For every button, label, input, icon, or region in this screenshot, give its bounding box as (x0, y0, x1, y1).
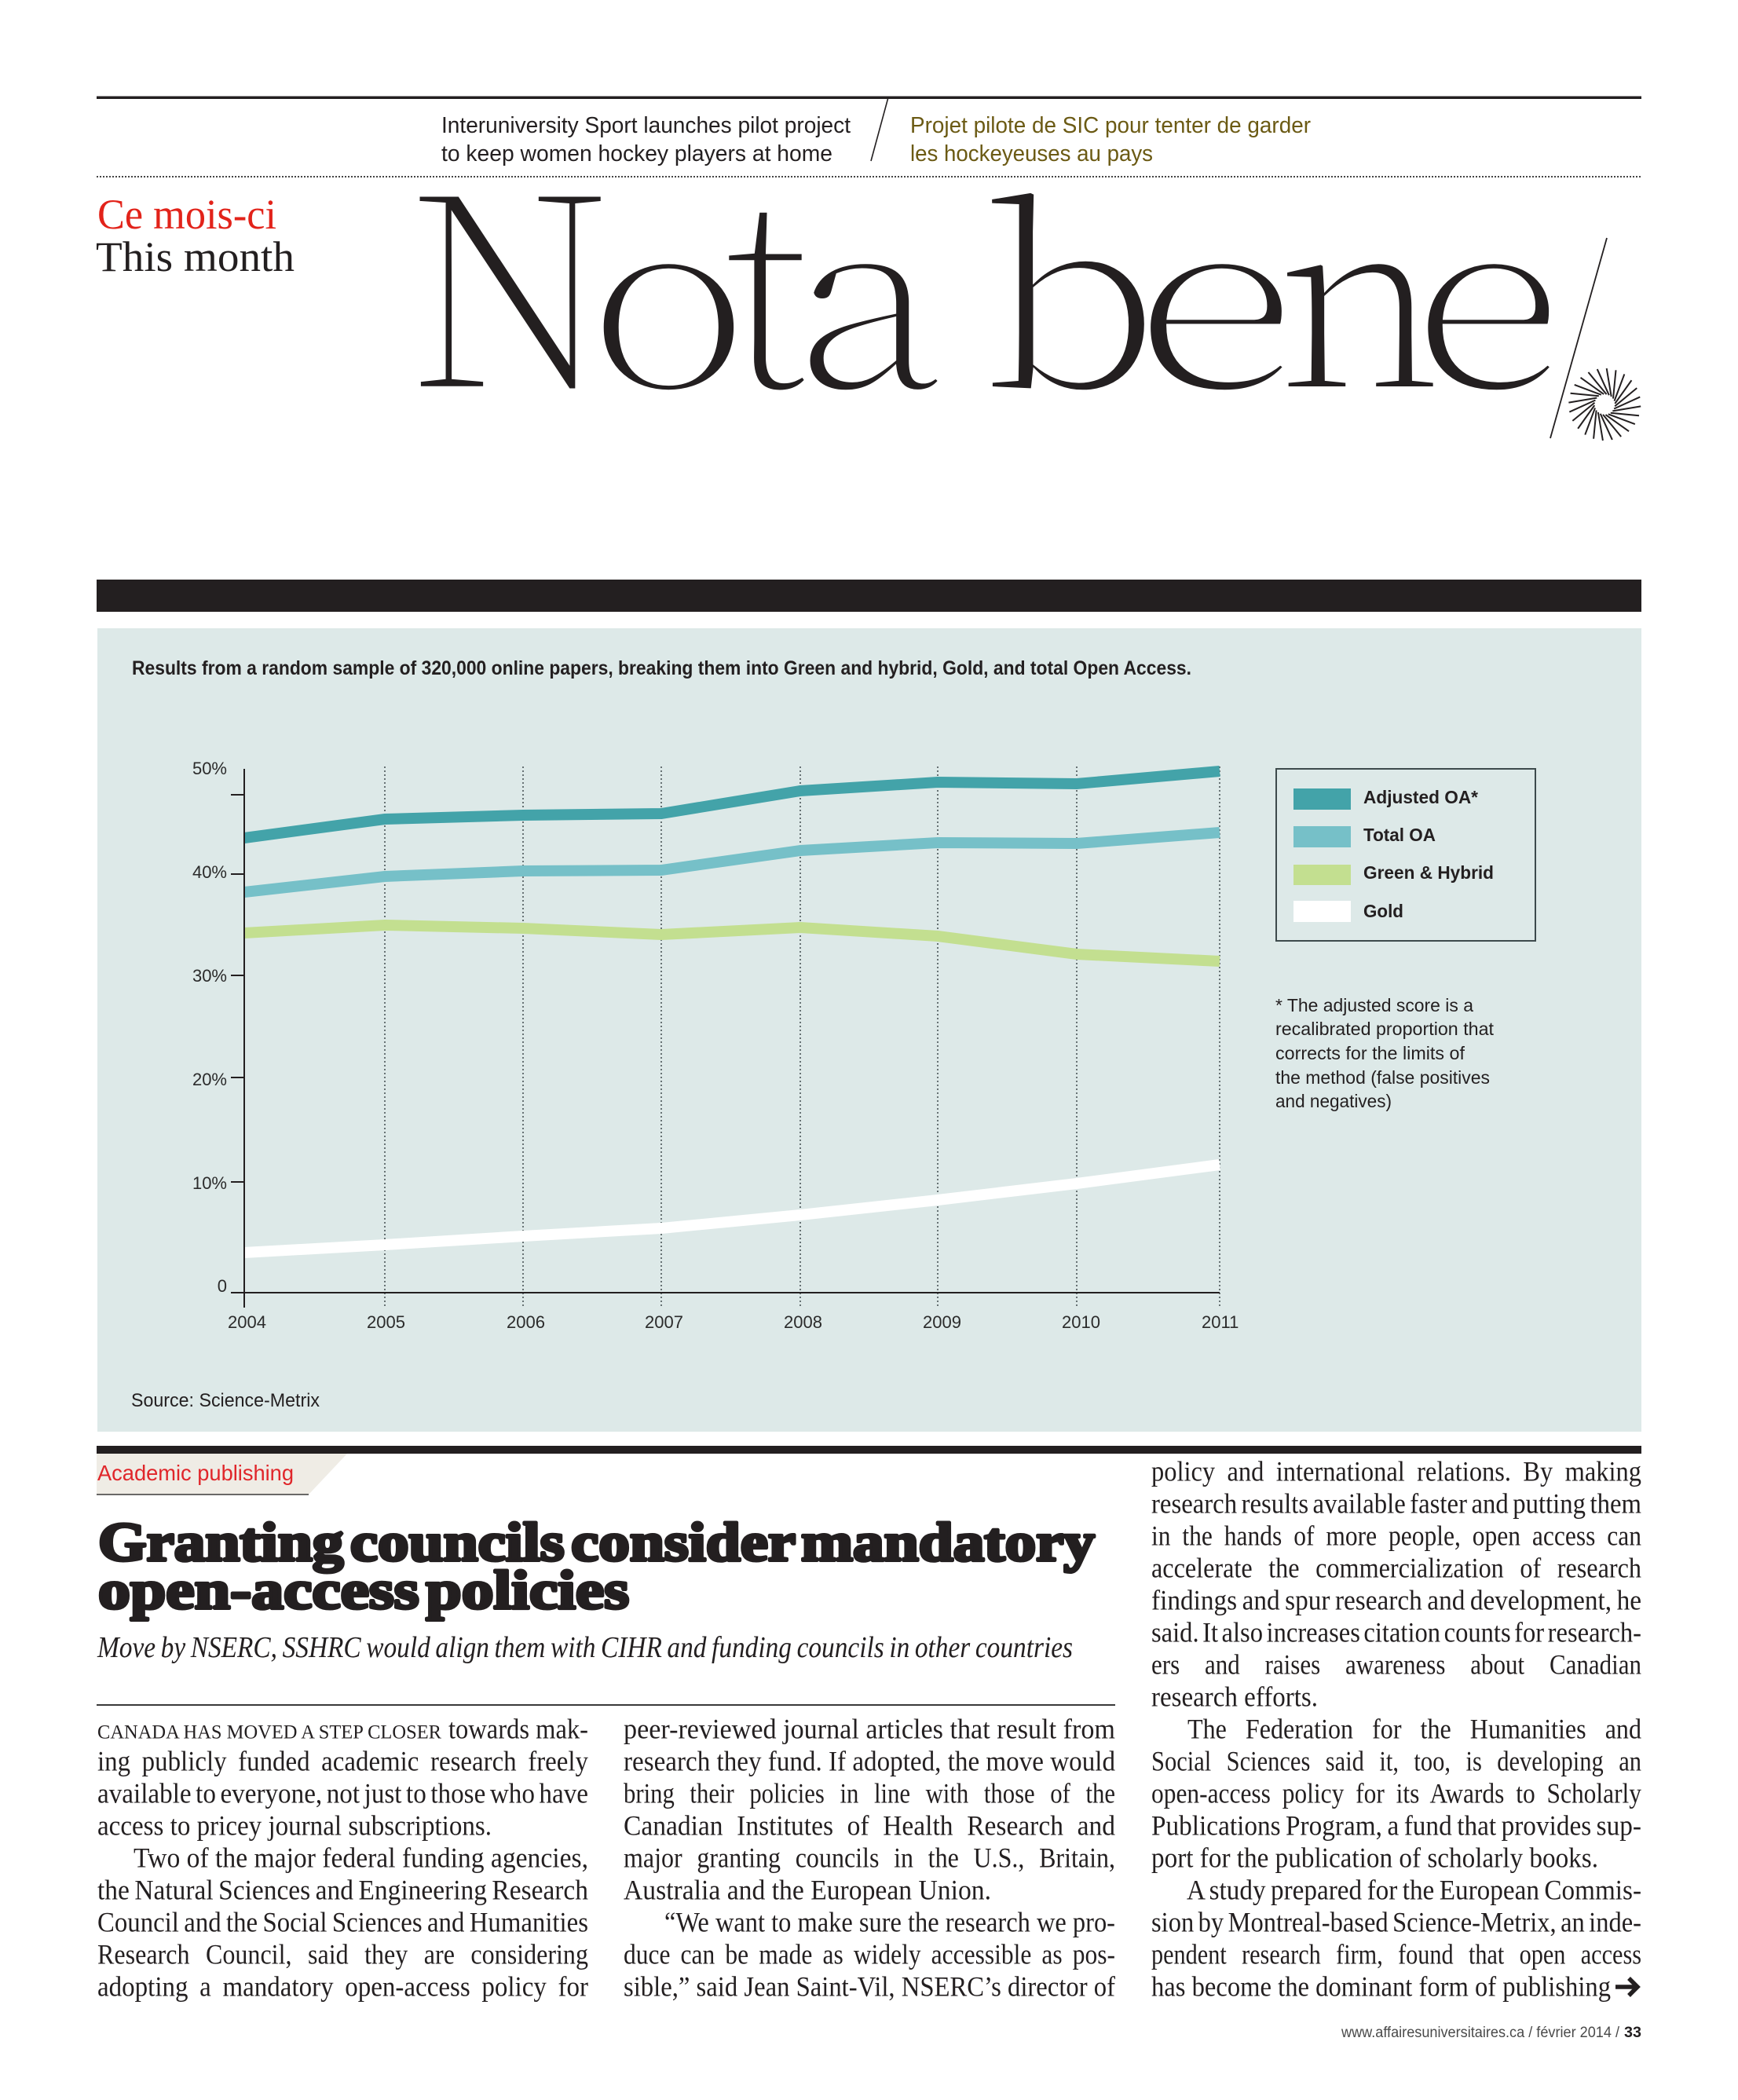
x axis labels: 2008 (784, 1312, 822, 1332)
gridlines by year (385, 766, 1220, 1308)
source: Source: Science-Metrix (131, 1390, 320, 1411)
teaser: French (910, 113, 1311, 166)
series: Gold (244, 1165, 1220, 1253)
article column 3: findings and spur research and development, he (1151, 1585, 1641, 1616)
article column 3: policy and international relations. By making (1151, 1456, 1641, 1487)
top rule (97, 96, 1641, 99)
y axis labels: 30% (192, 966, 227, 986)
title: Nota bene: N (407, 82, 613, 465)
article column 1: the Natural Sciences and Engineering Research (97, 1874, 588, 1905)
footer: 33 (1624, 2025, 1641, 2041)
article column 3 (1151, 1456, 1641, 2003)
teaser: French: Projet pilote de SIC pour tenter de garder (910, 113, 1311, 138)
legend: Gold (1363, 901, 1403, 921)
teaser: French: les hockeyeuses au pays (910, 141, 1153, 166)
panel background (97, 628, 1641, 1432)
series: Adjusted OA (244, 771, 1220, 838)
series: Total OA (244, 832, 1220, 892)
x axis labels: 2010 (1062, 1312, 1100, 1332)
article column 2: duce can be made as widely accessible as pos- (624, 1938, 1115, 1970)
x axis labels (228, 1312, 1239, 1332)
section label: Ce mois-ci: Ce mois-ci (97, 191, 276, 238)
x axis labels: 2009 (923, 1312, 961, 1332)
article column 2 (624, 1714, 1115, 2003)
legend: Adjusted OA* (1363, 787, 1478, 807)
article column 3: in the hands of more people, open access can (1151, 1520, 1641, 1552)
line chart (192, 759, 1239, 1332)
article column 2: Canadian Institutes of Health Research and (624, 1809, 1115, 1841)
footnote: and negatives) (1275, 1091, 1392, 1111)
footnote: the method (false positives (1275, 1067, 1490, 1088)
article column 2: sible,” said Jean Saint-Vil, NSERC’s director of (624, 1971, 1115, 2003)
article column 3: pendent research firm, found that open access (1151, 1938, 1641, 1970)
teaser: English (441, 113, 851, 166)
article column 1: Two of the major federal funding agencies, (134, 1842, 588, 1874)
footer: www.affairesuniversitaires.ca / février 2014 / (1341, 2025, 1620, 2041)
article column 3: sion by Montreal-based Science-Metrix, an inde- (1151, 1907, 1641, 1938)
legend: Green & Hybrid (1363, 862, 1494, 883)
article column 3: port for the publication of scholarly books. (1151, 1842, 1598, 1874)
headline: open-access policies (98, 1560, 629, 1621)
chart heading: Results from a random sample of 320,000 online papers, breaking them into Green and hybrid, Gold, and total Open Access. (132, 657, 1191, 679)
title: Nota bene: t (724, 81, 810, 465)
title: Nota bene: a (793, 112, 944, 457)
y axis (231, 769, 244, 1308)
deck: Move by NSERC, SSHRC would align them with CIHR and funding councils in other countries (97, 1631, 1073, 1664)
title: Nota bene: o (587, 111, 750, 457)
legend: Total OA (1363, 825, 1436, 845)
tag: Academic publishing (97, 1454, 347, 1495)
headline: Granting councils consider mandatory (98, 1513, 1095, 1573)
y axis labels (192, 759, 227, 1296)
article column 1: Council and the Social Sciences and Humanities (97, 1907, 588, 1938)
teaser: English: to keep women hockey players at home (441, 141, 832, 166)
article column 2: major granting councils in the U.S., Britain, (624, 1842, 1115, 1874)
section label: This month: This month (96, 233, 295, 280)
y axis labels: 0 (218, 1276, 227, 1296)
article column 3: Publications Program, a fund that provides sup- (1151, 1809, 1641, 1841)
icon: continue arrow (1615, 1978, 1637, 1996)
legend (1276, 769, 1535, 941)
article column 1: Research Council, said they are considering (97, 1938, 588, 1970)
tag: Academic publishing: Academic publishing (97, 1461, 294, 1485)
article column 1: available to everyone, not just to those who have (97, 1778, 588, 1809)
y axis labels: 50% (192, 759, 227, 778)
x axis labels: 2007 (645, 1312, 683, 1332)
article column 3: research results available faster and putting them (1151, 1487, 1641, 1519)
y axis labels: 40% (192, 862, 227, 882)
article column 1: access to pricey journal subscriptions. (97, 1809, 492, 1841)
article column 2: bring their policies in line with those of the (624, 1778, 1115, 1809)
article column 2: “We want to make sure the research we pro- (664, 1907, 1115, 1938)
article column 1: adopting a mandatory open-access policy for (97, 1971, 588, 2003)
teaser slash (871, 97, 888, 161)
article column 3: The Federation for the Humanities and (1187, 1714, 1641, 1745)
footnote: recalibrated proportion that (1275, 1019, 1495, 1039)
x axis labels: 2004 (228, 1312, 266, 1332)
article column 3: research efforts. (1151, 1681, 1318, 1712)
x axis labels: 2011 (1202, 1312, 1239, 1332)
article rule (97, 1446, 1641, 1454)
x axis labels: 2006 (507, 1312, 545, 1332)
footnote: * The adjusted score is a (1275, 995, 1473, 1015)
series: Green and Hybrid (244, 925, 1220, 961)
headline (98, 1513, 1095, 1621)
title slash (1550, 238, 1607, 438)
article column 2: peer-reviewed journal articles that result from (624, 1714, 1115, 1745)
article column 2: Australia and the European Union. (624, 1874, 991, 1905)
article column 1: towards mak- (448, 1714, 588, 1745)
article column 1: CANADA HAS MOVED A STEP CLOSER (97, 1721, 441, 1743)
article column 3: said. It also increases citation counts for research- (1151, 1616, 1641, 1648)
article column 3: ers and raises awareness about Canadian (1151, 1649, 1641, 1681)
footnote: corrects for the limits of (1275, 1043, 1465, 1063)
article column 3: accelerate the commercialization of research (1151, 1552, 1641, 1583)
x axis labels: 2005 (367, 1312, 405, 1332)
panel: open access chart (97, 628, 1641, 1432)
x axis (231, 1292, 1220, 1293)
article column 1 (97, 1714, 588, 2003)
article column 3: Social Sciences said it, too, is developing an (1151, 1745, 1641, 1776)
article column 3: has become the dominant form of publishing (1151, 1971, 1611, 2003)
title: Nota bene: b (978, 105, 1162, 459)
y axis labels: 10% (192, 1173, 227, 1193)
y axis labels: 20% (192, 1070, 227, 1089)
black band (97, 580, 1641, 612)
title: Nota bene: n (1275, 112, 1444, 457)
teaser: English: Interuniversity Sport launches pilot project (441, 113, 851, 138)
title: Nota bene: e (1411, 112, 1564, 457)
footnote (1275, 995, 1495, 1111)
icon: sunburst (1568, 368, 1641, 441)
article column 1: ing publicly funded academic research freely (97, 1745, 588, 1776)
article column 3: open-access policy for its Awards to Scholarly (1151, 1778, 1641, 1809)
title: Nota bene: e (1132, 112, 1298, 457)
title: Nota bene (407, 81, 1564, 465)
article column 3: A study prepared for the European Commis- (1187, 1874, 1641, 1905)
article column 2: research they fund. If adopted, the move would (624, 1745, 1115, 1776)
